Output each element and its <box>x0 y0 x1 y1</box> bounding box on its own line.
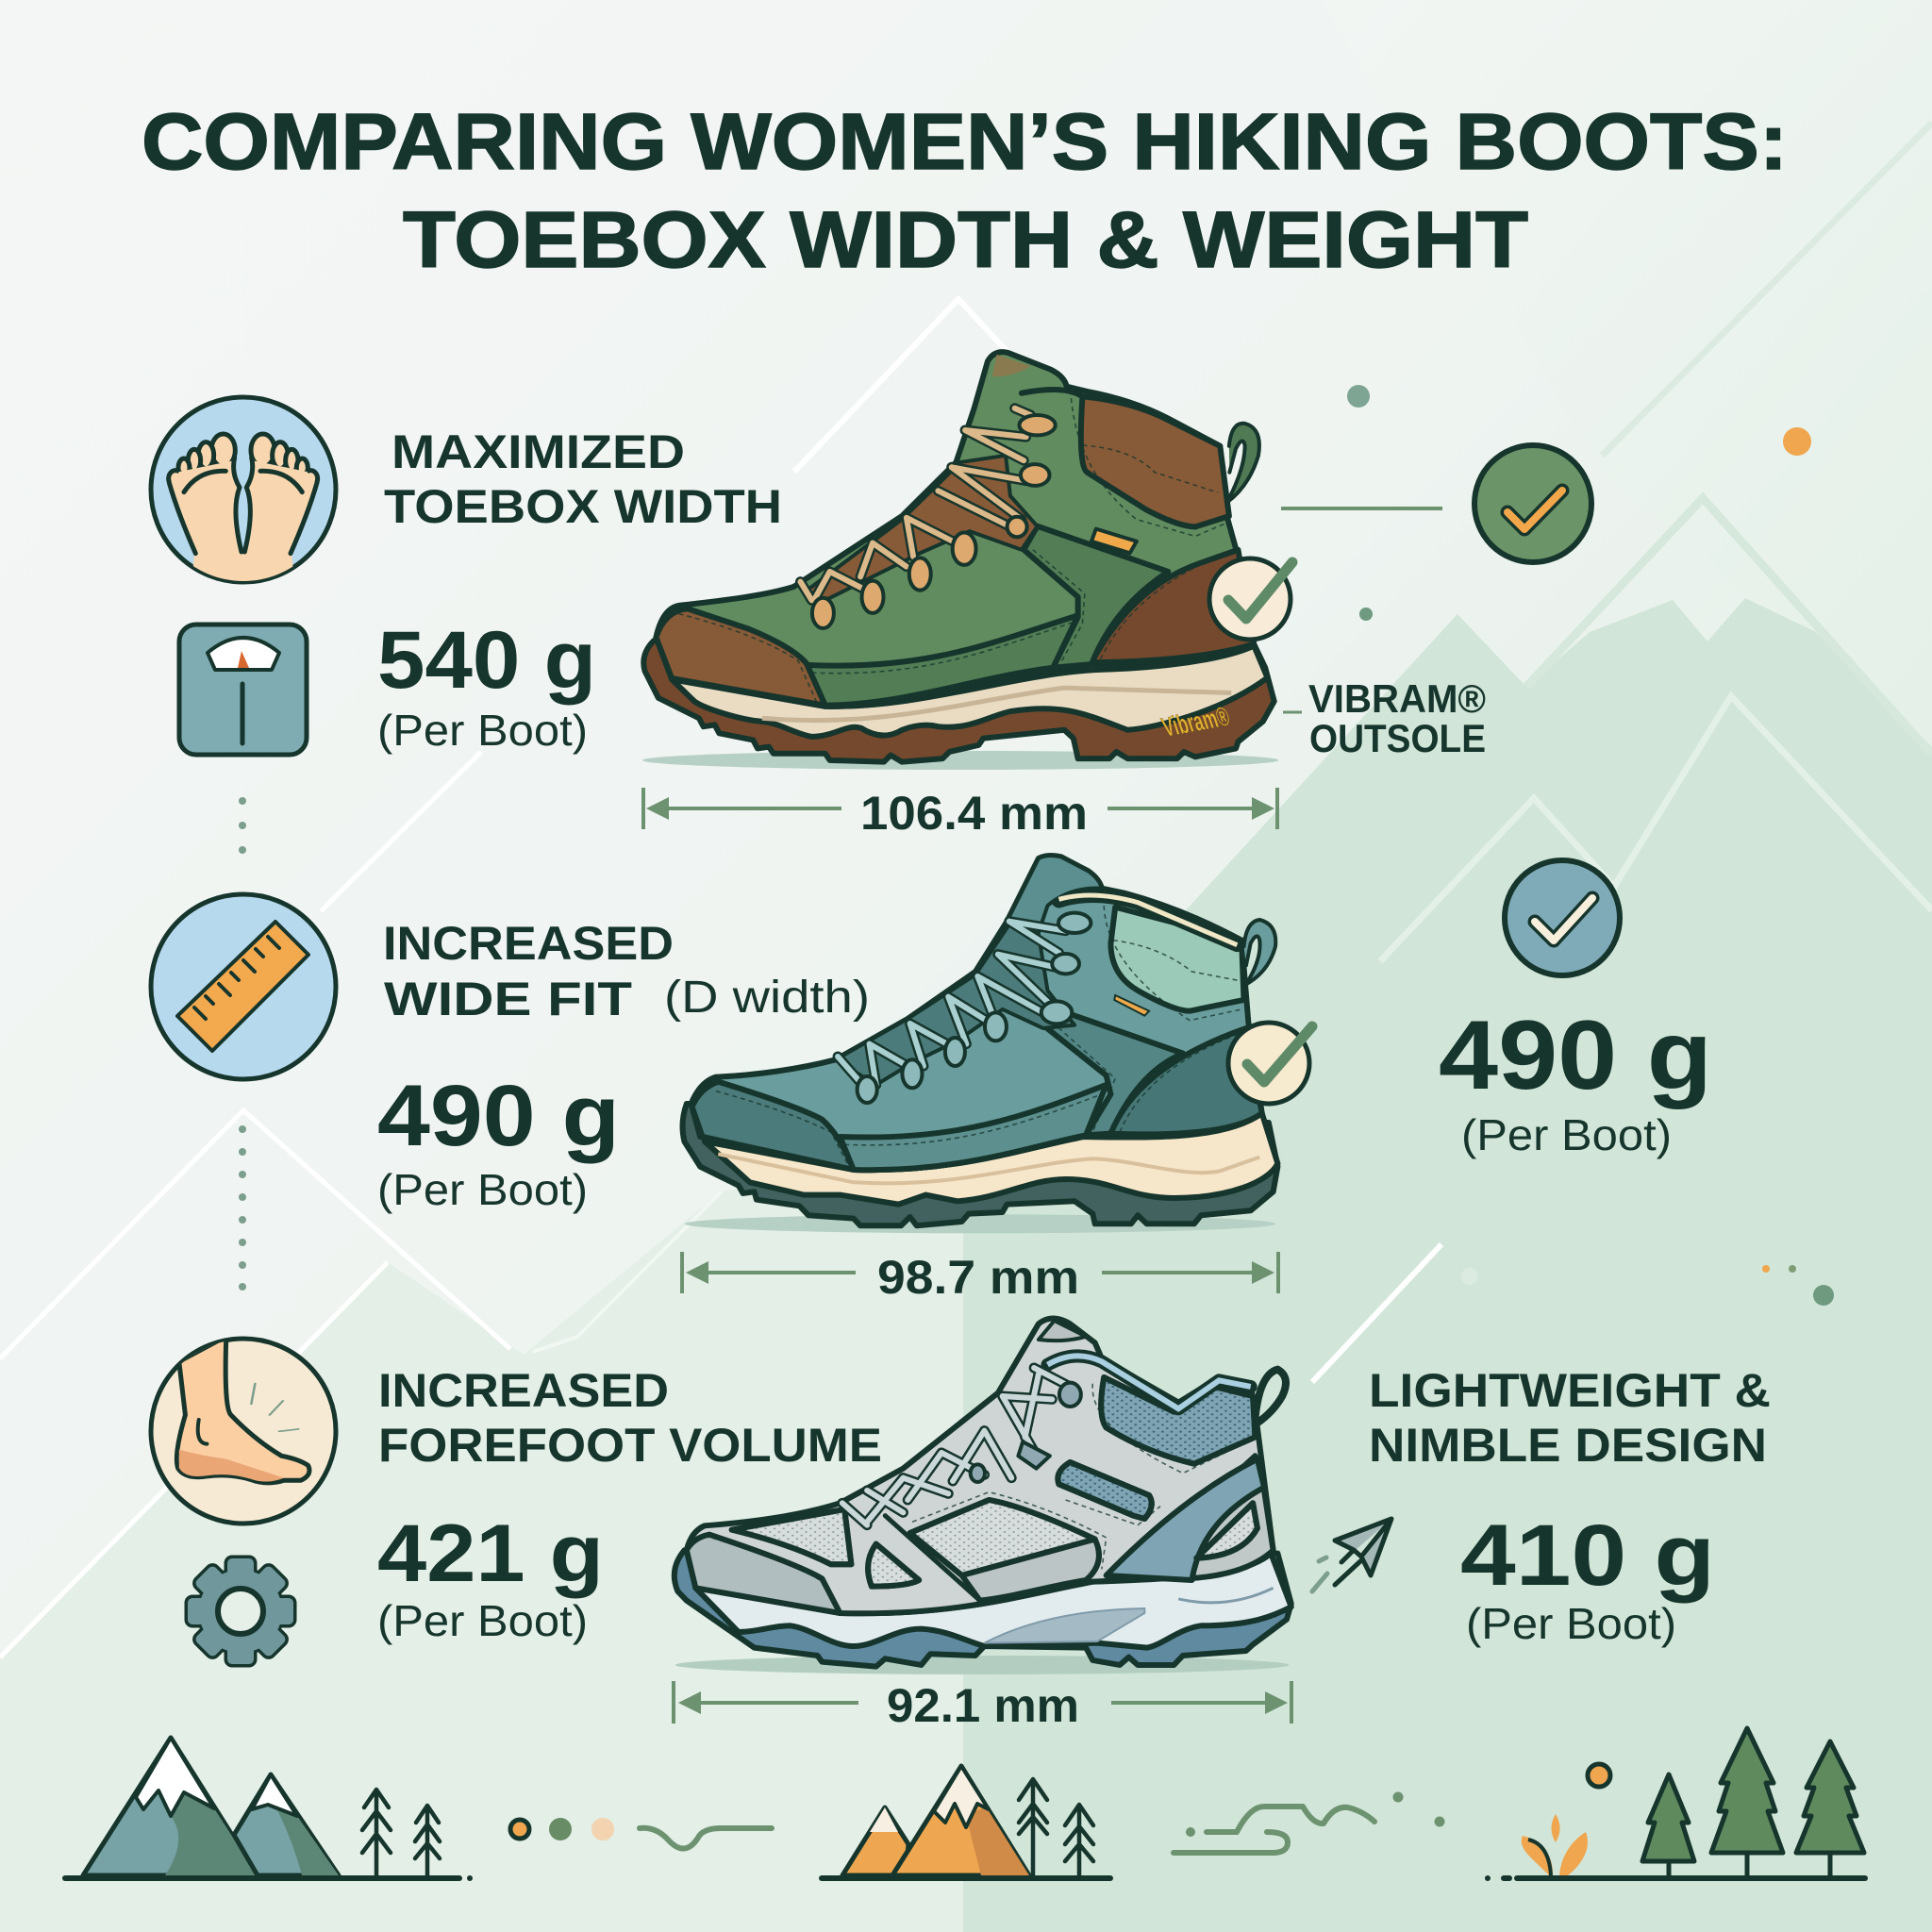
title <box>142 97 1788 284</box>
text block: lightweight and nimble design: LIGHTWEIGHT & <box>1369 1364 1771 1417</box>
icon: ruler <box>151 894 336 1079</box>
dotted connector 2 <box>239 1125 246 1291</box>
dimension: 98.7 mm <box>682 1251 1278 1304</box>
callout: top check badge <box>1281 445 1591 562</box>
icon: foot side view <box>151 1337 336 1524</box>
text block: increased forefoot volume: (Per Boot) <box>377 1596 588 1645</box>
text block: increased forefoot volume: INCREASED <box>378 1364 669 1417</box>
text block: increased wide fit <box>377 917 870 1214</box>
text block: maximized toebox width: (Per Boot) <box>377 706 588 755</box>
dimension: 92.1 mm <box>674 1679 1291 1732</box>
decorative dots <box>1347 385 1834 1306</box>
footer: wind squiggles <box>1174 1794 1441 1853</box>
text block: increased wide fit: (D width) <box>664 973 870 1023</box>
boot 1: green and brown <box>642 352 1278 770</box>
text block: increased forefoot volume <box>377 1364 882 1645</box>
callout: vibram outsole: OUTSOLE <box>1309 716 1486 760</box>
footer: orange mountains <box>822 1766 1110 1878</box>
dimension: 98.7 mm: 98.7 mm <box>877 1251 1079 1304</box>
text block: increased wide fit: WIDE FIT <box>384 973 632 1025</box>
dimension: 106.4 mm: 106.4 mm <box>860 787 1088 840</box>
boot 1: green and brown: Vibram® <box>1158 701 1234 742</box>
text block: maximized toebox width: MAXIMIZED <box>391 425 685 478</box>
dimension: 106.4 mm <box>643 787 1277 840</box>
text block: increased forefoot volume: FOREFOOT VOLUME <box>378 1419 882 1472</box>
text block: increased forefoot volume: 421 g <box>377 1508 604 1599</box>
text block: lightweight and nimble design <box>1369 1364 1771 1648</box>
title: TOEBOX WIDTH & WEIGHT <box>403 195 1528 284</box>
dimension: 92.1 mm: 92.1 mm <box>887 1679 1079 1732</box>
boot 3: grey and blue <box>675 1318 1291 1674</box>
callout: vibram outsole: VIBRAM® <box>1308 676 1486 721</box>
badge: boot 1 check <box>1209 558 1292 640</box>
badge: boot 2 check <box>1228 1023 1312 1104</box>
text block: right weight 490 g: (Per Boot) <box>1461 1110 1672 1159</box>
icon: speed arrow <box>1312 1519 1391 1591</box>
text block: maximized toebox width: 540 g <box>377 615 596 706</box>
icon: weighing scale <box>179 625 307 755</box>
text block: maximized toebox width <box>377 425 782 755</box>
icon: bare feet <box>151 397 336 591</box>
dotted connector 1 <box>239 797 246 854</box>
title: COMPARING WOMEN’S HIKING BOOTS: <box>142 97 1788 186</box>
text block: maximized toebox width: TOEBOX WIDTH <box>384 480 782 533</box>
footer: dots and squiggle <box>510 1818 772 1849</box>
footer: right trees and plant <box>1485 1728 1865 1881</box>
text block: lightweight and nimble design: (Per Boot) <box>1466 1599 1676 1648</box>
boot 2: teal <box>683 856 1277 1233</box>
text block: lightweight and nimble design: 410 g <box>1460 1507 1715 1604</box>
callout: vibram outsole <box>1283 676 1486 760</box>
footer scene: left mountains <box>65 1738 473 1881</box>
text block: right weight 490 g: 490 g <box>1439 1001 1712 1110</box>
callout: second check badge <box>1505 860 1620 975</box>
icon: gear <box>188 1558 293 1664</box>
text block: increased wide fit: INCREASED <box>383 917 674 970</box>
text block: increased wide fit: 490 g <box>377 1068 620 1164</box>
text block: increased wide fit: (Per Boot) <box>377 1165 588 1214</box>
text block: right weight 490 g <box>1439 1001 1712 1159</box>
text block: lightweight and nimble design: NIMBLE DESIGN <box>1369 1419 1767 1472</box>
